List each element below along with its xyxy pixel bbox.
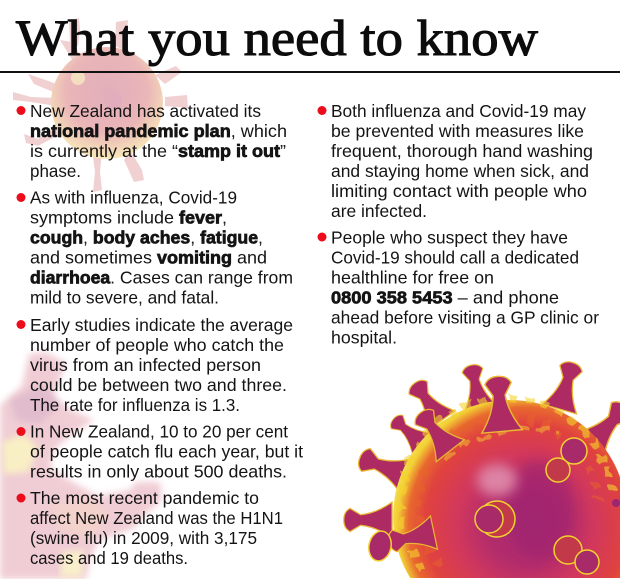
bullet: annual flu in New Zealand: [16, 422, 303, 482]
bullet: national pandemic plan: national pandemic plan , which: [30, 121, 287, 141]
bullet: healthline: ahead before visiting a GP clinic or: [331, 308, 599, 328]
magenta shadow: [506, 460, 574, 560]
bullet: annual flu in New Zealand: of people catch flu each year, but it: [30, 442, 303, 462]
bullet: symptoms: and sometimes vomiting and: [30, 248, 267, 268]
bullet: symptoms: diarrhoea. Cases can range from: [30, 268, 293, 288]
left column text: [16, 101, 303, 568]
bullet: prevention: and staying home when sick, and: [331, 161, 589, 181]
bullet: healthline: People who suspect they have: [331, 228, 568, 248]
bullet: transmission rate: [16, 315, 293, 415]
bullet: healthline: 0800 358 5453 – and phone: [331, 288, 559, 308]
title rule: [0, 71, 620, 73]
bullet: symptoms: cough, body aches, fatigue,: [30, 228, 263, 248]
background: faded virus top left: [13, 18, 188, 192]
bullet: healthline: [318, 228, 599, 348]
bullet: prevention: [318, 101, 593, 221]
spike heads on surface: [366, 438, 620, 574]
title: What you need to know: [16, 11, 538, 67]
bullet: H1N1 pandemic: cases and 19 deaths.: [30, 548, 188, 568]
virus body: [393, 400, 620, 578]
bullet: symptoms: symptoms include fever,: [30, 208, 227, 228]
bullet: symptoms: As with influenza, Covid-19: [30, 188, 237, 208]
right column text: [318, 101, 599, 348]
bullet: transmission rate: virus from an infected person: [30, 355, 261, 375]
bullet: annual flu in New Zealand: results in only about 500 deaths.: [30, 462, 287, 482]
bullet: transmission rate: The rate for influenza is 1.3.: [30, 395, 240, 415]
bullet: annual flu in New Zealand: In New Zealand, 10 to 20 per cent: [30, 422, 288, 442]
bullet: transmission rate: number of people who catch the: [30, 335, 284, 355]
bullet: prevention: limiting contact with people who: [331, 181, 587, 201]
bullet: prevention: be prevented with measures like: [331, 121, 584, 141]
bullet: transmission rate: could be between two and three.: [30, 375, 287, 395]
bullet: H1N1 pandemic: affect New Zealand was the H1N1: [30, 508, 283, 528]
bullet: prevention: Both influenza and Covid-19 may: [331, 101, 586, 121]
bullet: national pandemic plan: is currently at the “stamp it out”: [30, 141, 286, 161]
bullet: prevention: frequent, thorough hand washing: [331, 141, 593, 161]
bullet: H1N1 pandemic: The most recent pandemic to: [30, 488, 259, 508]
bullet: healthline: Covid-19 should call a dedicated: [331, 248, 579, 268]
bullet: national pandemic plan: [16, 101, 287, 181]
spikes in front of body: [385, 375, 523, 559]
bullet: national pandemic plan: New Zealand has activated its: [30, 101, 261, 121]
bullet: transmission rate: Early studies indicate the average: [30, 315, 293, 335]
bullet: prevention: are infected.: [331, 201, 427, 221]
bullet: symptoms: [16, 188, 293, 308]
spikes behind body: [344, 358, 620, 538]
bullet: national pandemic plan: phase.: [30, 161, 81, 181]
background: faded virus bottom left: [0, 352, 162, 579]
bullet: symptoms: mild to severe, and fatal.: [30, 288, 219, 308]
bullet: H1N1 pandemic: (swine flu) in 2009, with 3,175: [30, 528, 257, 548]
pale highlight: [477, 464, 517, 496]
body texture: [401, 398, 612, 570]
illustration: coronavirus bottom right: [344, 358, 620, 578]
bullet: H1N1 pandemic: [16, 488, 283, 568]
bullet: healthline: hospital.: [331, 328, 397, 348]
bullet: healthline: healthline for free on: [331, 268, 494, 288]
